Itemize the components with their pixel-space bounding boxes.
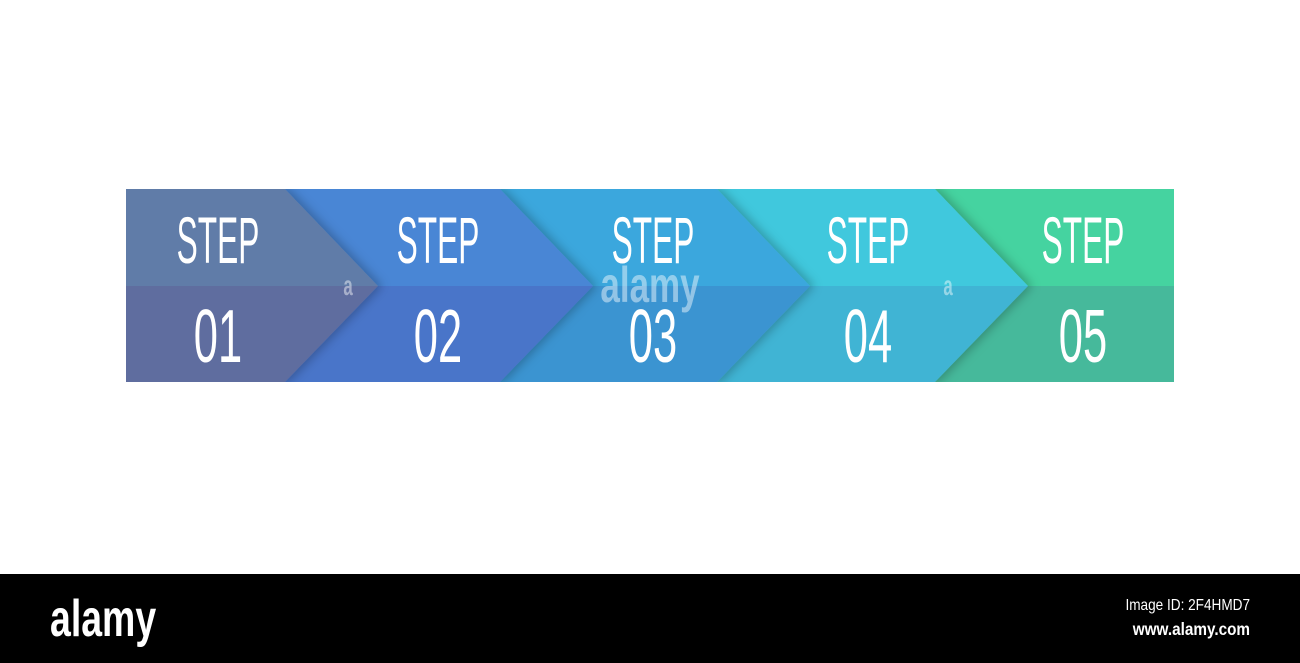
watermark: a <box>943 270 953 301</box>
step labels: 05 <box>1059 295 1107 378</box>
footer bar: www.alamy.com <box>1132 619 1250 639</box>
watermark: alamy <box>600 258 700 314</box>
step labels: 03 <box>629 295 677 378</box>
step labels: STEP <box>1042 203 1124 277</box>
watermark <box>343 258 953 314</box>
panel: step 04 <box>717 189 1034 382</box>
panel: step 01 <box>100 189 378 382</box>
step labels: 02 <box>414 295 462 378</box>
panel: step 03 <box>500 189 816 382</box>
step labels <box>177 203 1124 378</box>
panel: step 02 <box>285 189 599 382</box>
footer bar: Image ID: 2F4HMD7 <box>1125 597 1250 614</box>
step labels: STEP <box>612 203 694 277</box>
step labels: STEP <box>397 203 479 277</box>
panel: step 05 <box>935 189 1174 382</box>
step labels: STEP <box>827 203 909 277</box>
footer bar <box>0 574 1300 663</box>
step labels: STEP <box>177 203 259 277</box>
footer bar: alamy <box>50 589 156 647</box>
chevron bar <box>100 189 1174 382</box>
step labels: 04 <box>844 295 892 378</box>
watermark: a <box>343 270 353 301</box>
step labels: 01 <box>194 295 242 378</box>
